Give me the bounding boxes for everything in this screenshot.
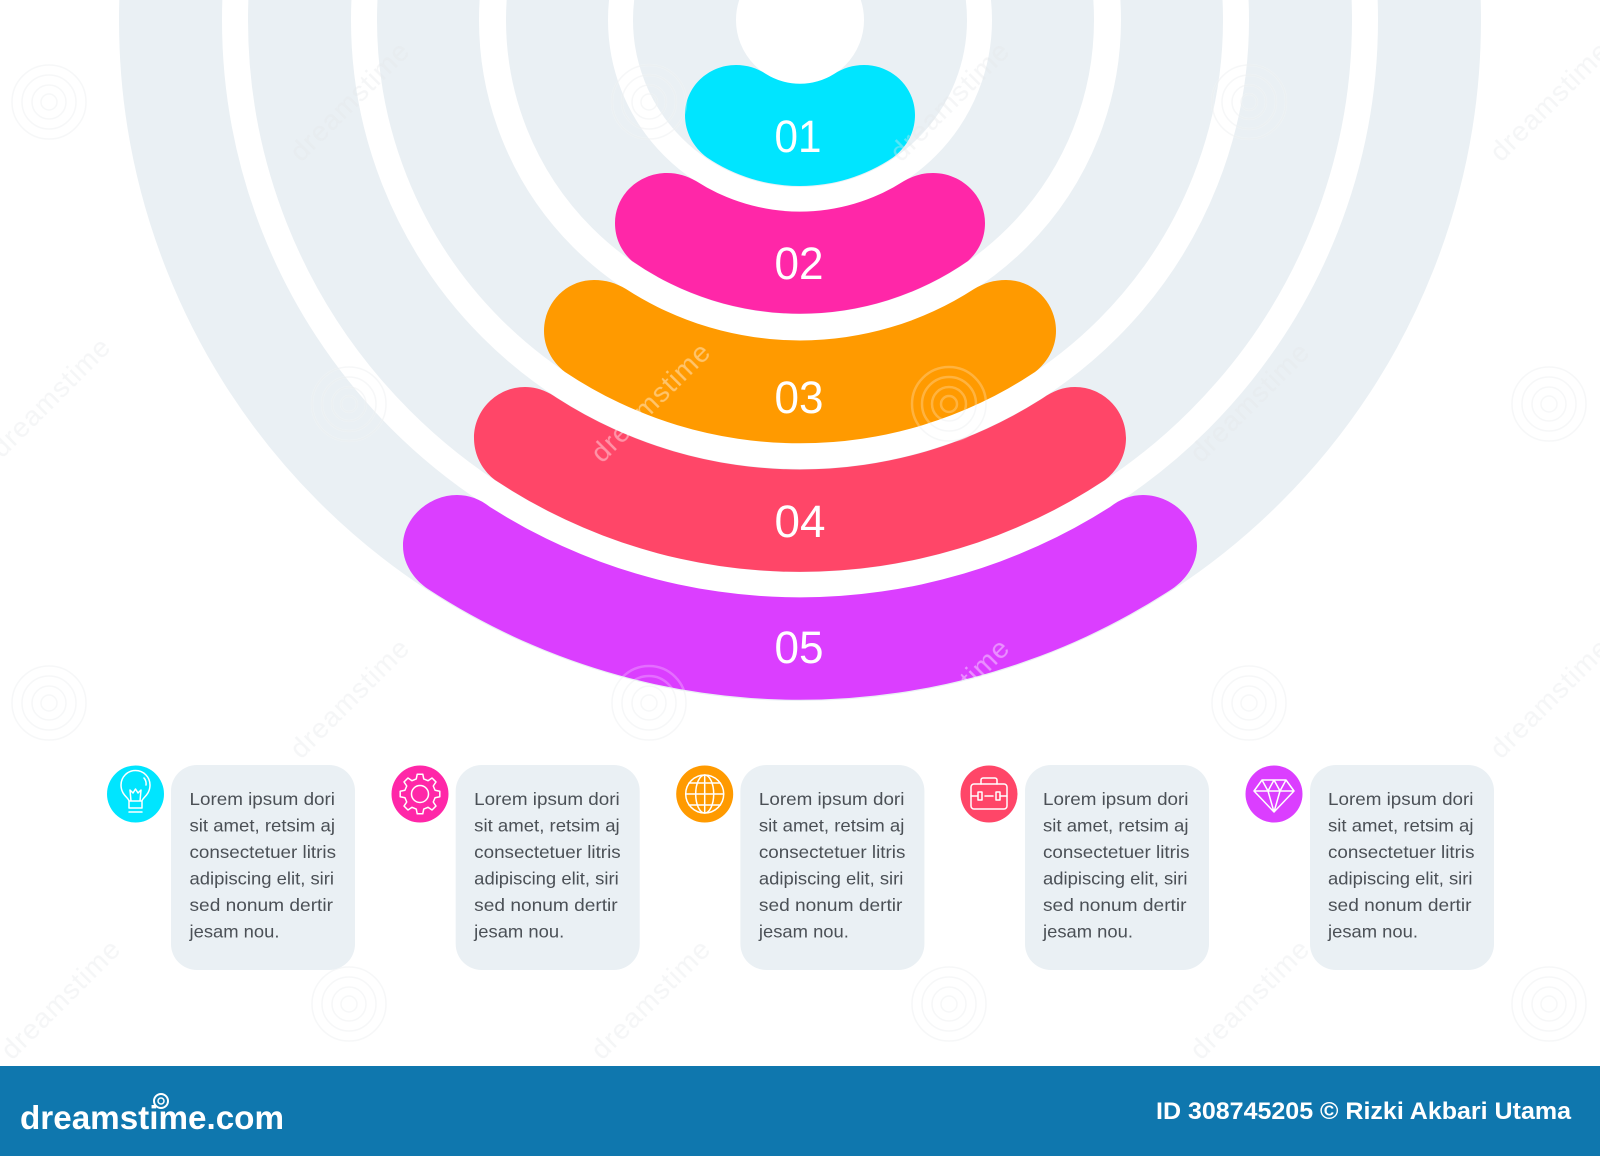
card 5: consectetuer litris [1328, 842, 1475, 862]
card 4: adipiscing elit, siri [1043, 868, 1188, 888]
card 2: Lorem ipsum dori [474, 789, 620, 809]
card 4 [1025, 765, 1209, 970]
segment 02 [615, 173, 985, 314]
card 1: jesam nou. [188, 922, 280, 942]
card 3: adipiscing elit, siri [759, 868, 903, 888]
card 1: sed nonum dertir [190, 895, 333, 915]
segment 05: 05 [774, 622, 824, 673]
watermark overlay: dreamstime [283, 632, 416, 764]
card 1: consectetuer litris [190, 842, 336, 862]
card 1: Lorem ipsum dori [190, 789, 335, 809]
legend item 2 [392, 765, 640, 970]
card 2: consectetuer litris [474, 842, 621, 862]
card 2: jesam nou. [473, 922, 564, 942]
card 3: sit amet, retsim aj [759, 816, 904, 836]
legend item 4 [960, 765, 1209, 970]
watermark overlay: dreamstime [283, 35, 416, 167]
watermark overlay: dreamstime [1183, 933, 1316, 1065]
card 3 [740, 765, 924, 970]
card 1 [171, 765, 355, 970]
icon: light bulb [107, 766, 164, 822]
icon: gear [392, 766, 448, 822]
segment 01 [685, 65, 915, 186]
icon: briefcase [960, 766, 1018, 822]
card 2: sit amet, retsim aj [474, 816, 620, 836]
card 5: adipiscing elit, siri [1328, 868, 1472, 888]
card 3: consectetuer litris [759, 842, 906, 862]
card 4: sed nonum dertir [1043, 895, 1187, 915]
card 5 [1310, 765, 1494, 970]
card 1: sit amet, retsim aj [190, 816, 335, 836]
card 2 [456, 765, 640, 970]
segment 01: 01 [774, 111, 822, 162]
watermark overlay: dreamstime [584, 933, 717, 1065]
segment 02: 02 [774, 238, 824, 289]
card 3: sed nonum dertir [759, 895, 903, 915]
watermark overlay: dreamstime [1183, 336, 1316, 468]
card 4: Lorem ipsum dori [1043, 789, 1188, 809]
icon: globe [676, 766, 733, 822]
card 5: sit amet, retsim aj [1328, 816, 1474, 836]
segment 04 [474, 387, 1126, 572]
footer banner [0, 1066, 1600, 1156]
icon: diamond [1246, 766, 1302, 822]
watermark overlay: dreamstime [883, 632, 1016, 764]
footer logo: dreamstime.com [20, 1099, 284, 1136]
arc pyramid [403, 65, 1197, 700]
card 4: jesam nou. [1042, 922, 1133, 942]
watermark overlay: dreamstime [584, 336, 717, 468]
concentric background rings [170, 0, 1430, 650]
card 4: sit amet, retsim aj [1043, 816, 1188, 836]
legend item 3 [676, 765, 924, 970]
card 5: Lorem ipsum dori [1328, 789, 1474, 809]
footer credit: ID 308745205 © Rizki Akbari Utama [1156, 1098, 1572, 1125]
card 3: Lorem ipsum dori [759, 789, 904, 809]
card 2: sed nonum dertir [474, 895, 618, 915]
card 3: jesam nou. [758, 922, 849, 942]
card 5: jesam nou. [1327, 922, 1418, 942]
segment 05 [403, 495, 1197, 700]
card 4: consectetuer litris [1043, 842, 1190, 862]
legend item 5 [1246, 765, 1494, 970]
segment 03: 03 [774, 372, 824, 423]
card 2: adipiscing elit, siri [474, 868, 619, 888]
watermark overlay: dreamstime [883, 35, 1016, 167]
segment 03 [544, 280, 1056, 443]
legend item 1 [107, 765, 355, 970]
card 5: sed nonum dertir [1328, 895, 1472, 915]
card 1: adipiscing elit, siri [190, 868, 334, 888]
segment 04: 04 [774, 496, 826, 547]
